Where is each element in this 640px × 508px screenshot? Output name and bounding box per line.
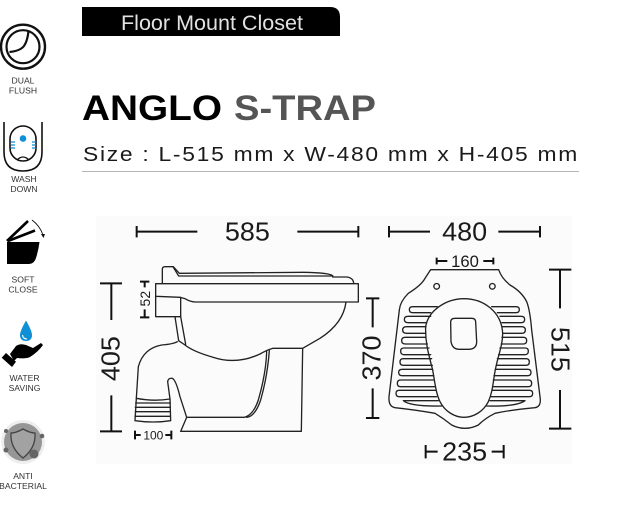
dimension 405 (95, 283, 125, 431)
dimension 100: 100 (143, 428, 164, 442)
icon: water saving (2, 320, 43, 367)
label: anti bacterial: ANTI (13, 471, 33, 481)
icon: soft close (7, 220, 45, 264)
header banner (82, 7, 340, 36)
label: dual flush: DUAL (12, 76, 34, 86)
label: wash down: WASH (11, 174, 37, 184)
dimension 480 (389, 217, 540, 247)
title (82, 89, 376, 128)
dimension 480: 480 (442, 217, 487, 247)
top view drawing (357, 217, 575, 467)
dimension 370: 370 (357, 335, 387, 380)
foot rests left (396, 307, 442, 406)
dimension 52: 52 (137, 291, 153, 306)
dimension 405: 405 (95, 336, 125, 381)
label: water saving: SAVING (9, 383, 41, 393)
icon: wash down (4, 122, 42, 171)
label: soft close: CLOSE (8, 285, 38, 295)
dimension 52 (137, 282, 153, 317)
dimension 160: 160 (451, 252, 479, 271)
dimension 515: 515 (545, 327, 575, 372)
label: anti bacterial: BACTERIAL (0, 481, 47, 491)
label: wash down: DOWN (10, 184, 38, 194)
dimension 515 (545, 270, 575, 429)
dimension 100 (135, 428, 171, 442)
dimension 585: 585 (225, 217, 270, 247)
label: dual flush: FLUSH (9, 86, 37, 96)
side view drawing (95, 217, 358, 442)
dimension 160 (437, 252, 493, 271)
label: soft close: SOFT (12, 274, 34, 284)
dimension 585 (137, 217, 358, 247)
title: ANGLO (82, 89, 222, 128)
dimension 235: 235 (442, 437, 487, 467)
foot rests right (487, 307, 533, 406)
dimension 235 (426, 437, 504, 467)
squatting pan outline (389, 270, 540, 428)
icon: dual flush (1, 25, 45, 69)
label: water saving: WATER (9, 373, 40, 383)
toilet side profile (135, 267, 358, 431)
dimension 370 (357, 298, 387, 418)
title: S-TRAP (234, 89, 376, 128)
header banner: Floor Mount Closet (121, 11, 303, 35)
icon: anti bacterial (1, 420, 45, 464)
size text: Size : L-515 mm x W-480 mm x H-405 mm (83, 144, 579, 166)
